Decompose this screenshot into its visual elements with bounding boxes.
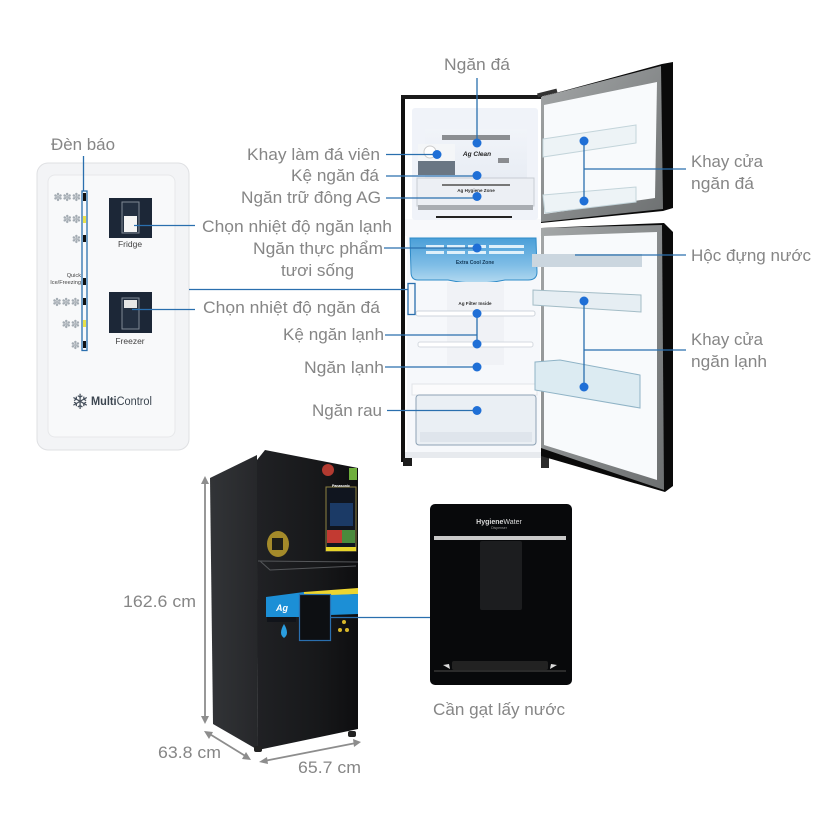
- freezer compartment: [412, 108, 538, 220]
- icon: temperature indicator lights: Quick: [67, 273, 81, 279]
- icon: temperature indicator lights: ✽✽: [63, 214, 81, 226]
- icon: temperature indicator lights: ✽: [71, 340, 80, 352]
- illustration: water dispenser: [430, 504, 572, 685]
- illustration: closed refrigerator: [210, 450, 358, 752]
- label: width: 65.7 cm: [298, 758, 361, 777]
- fridge side: [210, 455, 258, 750]
- callout: Ngăn thực phẩm tươi sống: Ngăn thực phẩm: [253, 239, 383, 258]
- fridge door: [532, 223, 673, 492]
- icon: temperature indicator lights: Ice/Freezing: [50, 280, 81, 286]
- energy sticker: [322, 464, 357, 551]
- callout: Hộc đựng nước: Hộc đựng nước: [691, 246, 811, 265]
- callout: Khay cửa ngăn đá: ngăn đá: [691, 174, 755, 193]
- callout: Ngăn đá: Ngăn đá: [444, 55, 511, 74]
- icon: temperature indicator lights: [50, 192, 86, 352]
- callout: Ngăn trữ đông AG: Ngăn trữ đông AG: [241, 188, 381, 207]
- freezer compartment: Ag Hygiene Zone: [457, 188, 495, 193]
- label: depth: 63.8 cm: [158, 743, 221, 762]
- callout: Ngăn lạnh: [304, 358, 482, 377]
- icon: temperature indicator lights: ✽✽✽: [52, 297, 80, 309]
- freezer door: [541, 62, 673, 223]
- label: height: 162.6 cm: [123, 592, 196, 611]
- icon: temperature indicator lights: ✽: [72, 234, 81, 246]
- callout: Khay cửa ngăn lạnh: ngăn lạnh: [691, 352, 767, 371]
- callout: Ngăn rau: Ngăn rau: [312, 401, 382, 420]
- callout: Ngăn thực phẩm tươi sống: [253, 239, 482, 280]
- callout: Ngăn trữ đông AG: [241, 188, 482, 207]
- callout: Ngăn rau: [312, 401, 482, 420]
- callout: Đèn báo: Đèn báo: [51, 135, 115, 154]
- callout: Khay cửa ngăn lạnh: Khay cửa: [691, 330, 764, 349]
- dimension arrow: width: [259, 739, 361, 764]
- icon: MultiControl logo: ❄: [71, 391, 89, 414]
- callout: Ngăn thực phẩm tươi sống: tươi sống: [281, 261, 354, 280]
- fresh food compartment: [407, 236, 540, 452]
- callout: Khay làm đá viên: [247, 145, 442, 164]
- icon: fridge temperature button: [109, 198, 152, 249]
- dimension arrow: height: [201, 476, 209, 724]
- callout: Khay cửa ngăn đá: Khay cửa: [691, 152, 764, 171]
- icon: freezer temperature button: [109, 292, 152, 346]
- callout: Kệ ngăn đá: Kệ ngăn đá: [291, 166, 380, 185]
- icon: freezer temperature button: Freezer: [115, 336, 145, 346]
- dimension arrow: depth: [204, 731, 251, 760]
- callout: Chọn nhiệt độ ngăn lạnh: Chọn nhiệt độ ngăn lạnh: [202, 217, 392, 236]
- door sticker: [266, 588, 358, 638]
- bottom door: [257, 559, 358, 750]
- callout: Kệ ngăn lạnh: [283, 309, 482, 348]
- icon: MultiControl logo: MultiControl: [91, 396, 152, 408]
- fridge feet: [254, 731, 356, 752]
- icon: fridge temperature button: Fridge: [118, 239, 142, 249]
- top door: [257, 450, 358, 562]
- freezer compartment: Ag Clean: [462, 151, 491, 158]
- dispenser highlight box: [300, 594, 330, 640]
- icon: MultiControl logo: [71, 391, 152, 414]
- callout: dispenser connector: [330, 616, 430, 618]
- icon: temperature indicator lights: ✽✽✽: [53, 192, 81, 204]
- icon: temperature indicator lights: ✽✽: [62, 319, 80, 331]
- energy sticker: Panasonic: [332, 484, 350, 488]
- cabinet body: [401, 89, 557, 468]
- callout: control panel location: [189, 284, 415, 314]
- illustration: open refrigerator: [401, 62, 673, 492]
- fresh food compartment: Ag Filter Inside: [458, 301, 492, 306]
- callout: Khay cửa ngăn đá: [580, 136, 764, 206]
- illustration: water dispenser: Dispenser: [491, 526, 508, 530]
- door seam: [258, 561, 358, 570]
- door sticker: Ag: [275, 603, 288, 613]
- gold badge: [267, 531, 289, 557]
- label: Cần gạt lấy nước: Cần gạt lấy nước: [433, 700, 566, 719]
- illustration: water dispenser: HygieneWater: [476, 519, 522, 526]
- callout: Đèn báo: [51, 135, 115, 350]
- callout: Chọn nhiệt độ ngăn đá: Chọn nhiệt độ ngăn đá: [203, 298, 381, 317]
- panel: control panel: [37, 163, 189, 450]
- callout: Kệ ngăn đá: [291, 166, 482, 185]
- callout: Ngăn đá: [444, 55, 511, 148]
- callout: Khay làm đá viên: Khay làm đá viên: [247, 145, 380, 164]
- callout: Kệ ngăn lạnh: Kệ ngăn lạnh: [283, 325, 384, 344]
- fresh food compartment: Extra Cool Zone: [456, 260, 494, 266]
- callout: Ngăn lạnh: Ngăn lạnh: [304, 358, 384, 377]
- callout: Khay cửa ngăn lạnh: [580, 296, 767, 392]
